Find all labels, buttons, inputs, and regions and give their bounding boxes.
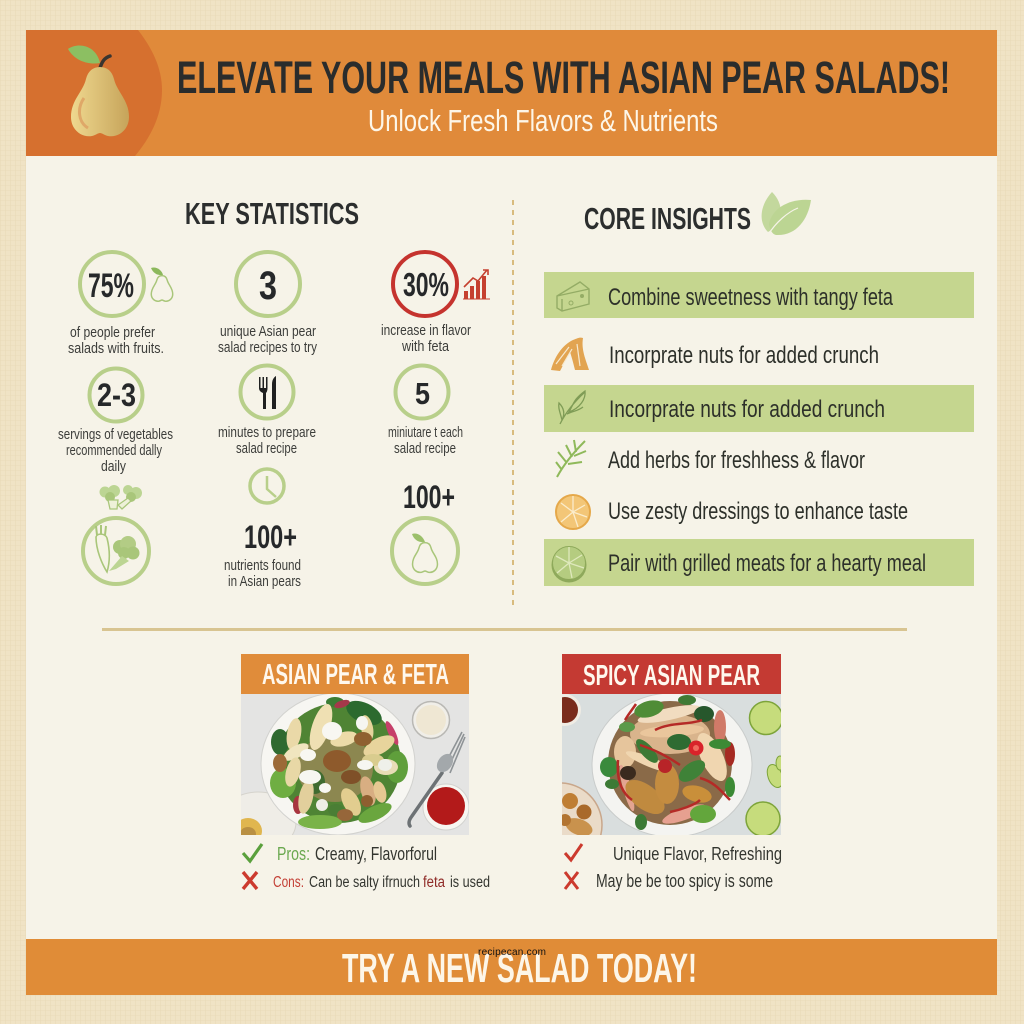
panel: core insights [544, 192, 974, 586]
icon: pear [68, 46, 129, 136]
icon: small broccoli [100, 485, 142, 509]
stat: 100+ nutrients: 100+ [244, 519, 297, 555]
stat: 3 recipes: salad recipes to try [218, 340, 318, 356]
fork [409, 773, 442, 826]
insight row 6 [544, 539, 974, 586]
mixed centre [297, 734, 373, 802]
stat: 2-3 servings [58, 368, 173, 475]
insight row 1 [544, 272, 974, 318]
insight row 2 [551, 338, 879, 371]
insight row 2: Incorprate nuts for added crunch [609, 342, 879, 369]
panel: spicy asian pear recipe [562, 654, 782, 891]
cons: is used [450, 874, 490, 891]
stat: 2-3 servings: recommended dally [66, 443, 163, 459]
watermark: recipecan.com [478, 947, 546, 958]
salad photo illustration [562, 694, 781, 835]
sauce bowl [423, 784, 469, 830]
content panel [26, 156, 997, 939]
walnuts [323, 750, 351, 772]
recipe heading: SPICY ASIAN PEAR [583, 660, 760, 692]
recipe heading [241, 654, 469, 694]
pros: Unique Flavor, Refreshing [613, 844, 782, 864]
stat: 3 recipes [218, 252, 318, 356]
stat: 30%: with feta [401, 339, 450, 355]
pros [243, 844, 437, 864]
recipe heading [562, 654, 781, 694]
stat: 75% [68, 252, 173, 357]
panel: asian pear and feta recipe [220, 654, 490, 891]
insight row 3: Incorprate nuts for added crunch [609, 396, 885, 423]
footer call to action [26, 939, 997, 995]
stat: 2-3 servings: 2-3 [97, 377, 136, 413]
stat: 100+ nutrients [224, 519, 301, 590]
ramekin of feta [412, 702, 450, 738]
header banner [26, 30, 997, 156]
stat: 5: 5 [415, 376, 430, 411]
stat: 75%: of people prefer [70, 325, 155, 341]
footer call to action: TRY A NEW SALAD TODAY! [342, 945, 697, 991]
stat: 3 recipes: unique Asian pear [220, 324, 316, 340]
stat: 5: salad recipe [394, 441, 456, 457]
stat: 75%: 75% [88, 267, 134, 305]
salad base [608, 701, 732, 825]
horizontal divider [102, 628, 907, 631]
heading: key statistics: KEY STATISTICS [185, 196, 359, 231]
stat: 3 recipes: 3 [259, 264, 277, 308]
cons: May be be too spicy is some [596, 871, 773, 891]
small bowl [562, 694, 581, 726]
vertical dashed divider [512, 200, 514, 610]
stat: 100+ nutrients: in Asian pears [228, 574, 301, 590]
stat: 100+ pear: 100+ [403, 479, 455, 515]
subtitle: Unlock Fresh Flavors & Nutrients [368, 103, 718, 138]
stat: 100+ nutrients: nutrients found [224, 558, 301, 574]
pros: Pros: [277, 844, 310, 864]
heading: core insights: CORE INSIGHTS [584, 201, 751, 236]
icon: clock [250, 469, 284, 503]
insight row 5 [556, 495, 908, 529]
insight row 3 [544, 385, 974, 432]
cons: Cons: [273, 874, 304, 891]
stat: 100+ pear [392, 479, 458, 584]
icon: leaves [762, 192, 811, 235]
stat: fork and knife [218, 366, 316, 457]
stat: 30%: 30% [403, 266, 449, 303]
cons [565, 871, 773, 891]
insight row 6: Pair with grilled meats for a hearty meal [608, 550, 926, 577]
panel: key statistics [58, 196, 490, 590]
cons: Can be salty ifrnuch [309, 874, 420, 891]
pear slices [286, 718, 302, 749]
dark gap [620, 766, 636, 780]
insight row 4: Add herbs for freshhess & flavor [608, 447, 865, 474]
stat: 5: miniutare t each [388, 425, 463, 441]
greens [277, 703, 401, 823]
stat: fork and knife: minutes to prepare [218, 425, 316, 441]
pros: Creamy, Flavorforul [315, 844, 437, 864]
sauce [618, 704, 730, 812]
stat: 5 [388, 366, 463, 457]
insight row 4 [556, 440, 865, 477]
insight row 5: Use zesty dressings to enhance taste [608, 498, 908, 525]
stat: fork and knife: salad recipe [236, 441, 297, 457]
stat: 30% [381, 252, 490, 355]
cons [243, 872, 490, 891]
bowl of fried chicken [562, 782, 603, 835]
pros [565, 844, 782, 864]
stat: 75%: salads with fruits. [68, 341, 164, 357]
stat: 30%: increase in flavor [381, 323, 471, 339]
icon: carrot and broccoli [83, 518, 149, 584]
recipe heading: ASIAN PEAR & FETA [262, 659, 449, 691]
feta [322, 722, 342, 740]
stat: 2-3 servings: daily [101, 459, 127, 475]
cons: feta [423, 874, 445, 891]
limes [750, 702, 782, 734]
insight row 1: Combine sweetness with tangy feta [608, 284, 893, 311]
salad photo illustration [241, 694, 469, 835]
stat: 2-3 servings: servings of vegetables [58, 427, 173, 443]
chicken [625, 780, 664, 814]
leaves [636, 739, 658, 763]
